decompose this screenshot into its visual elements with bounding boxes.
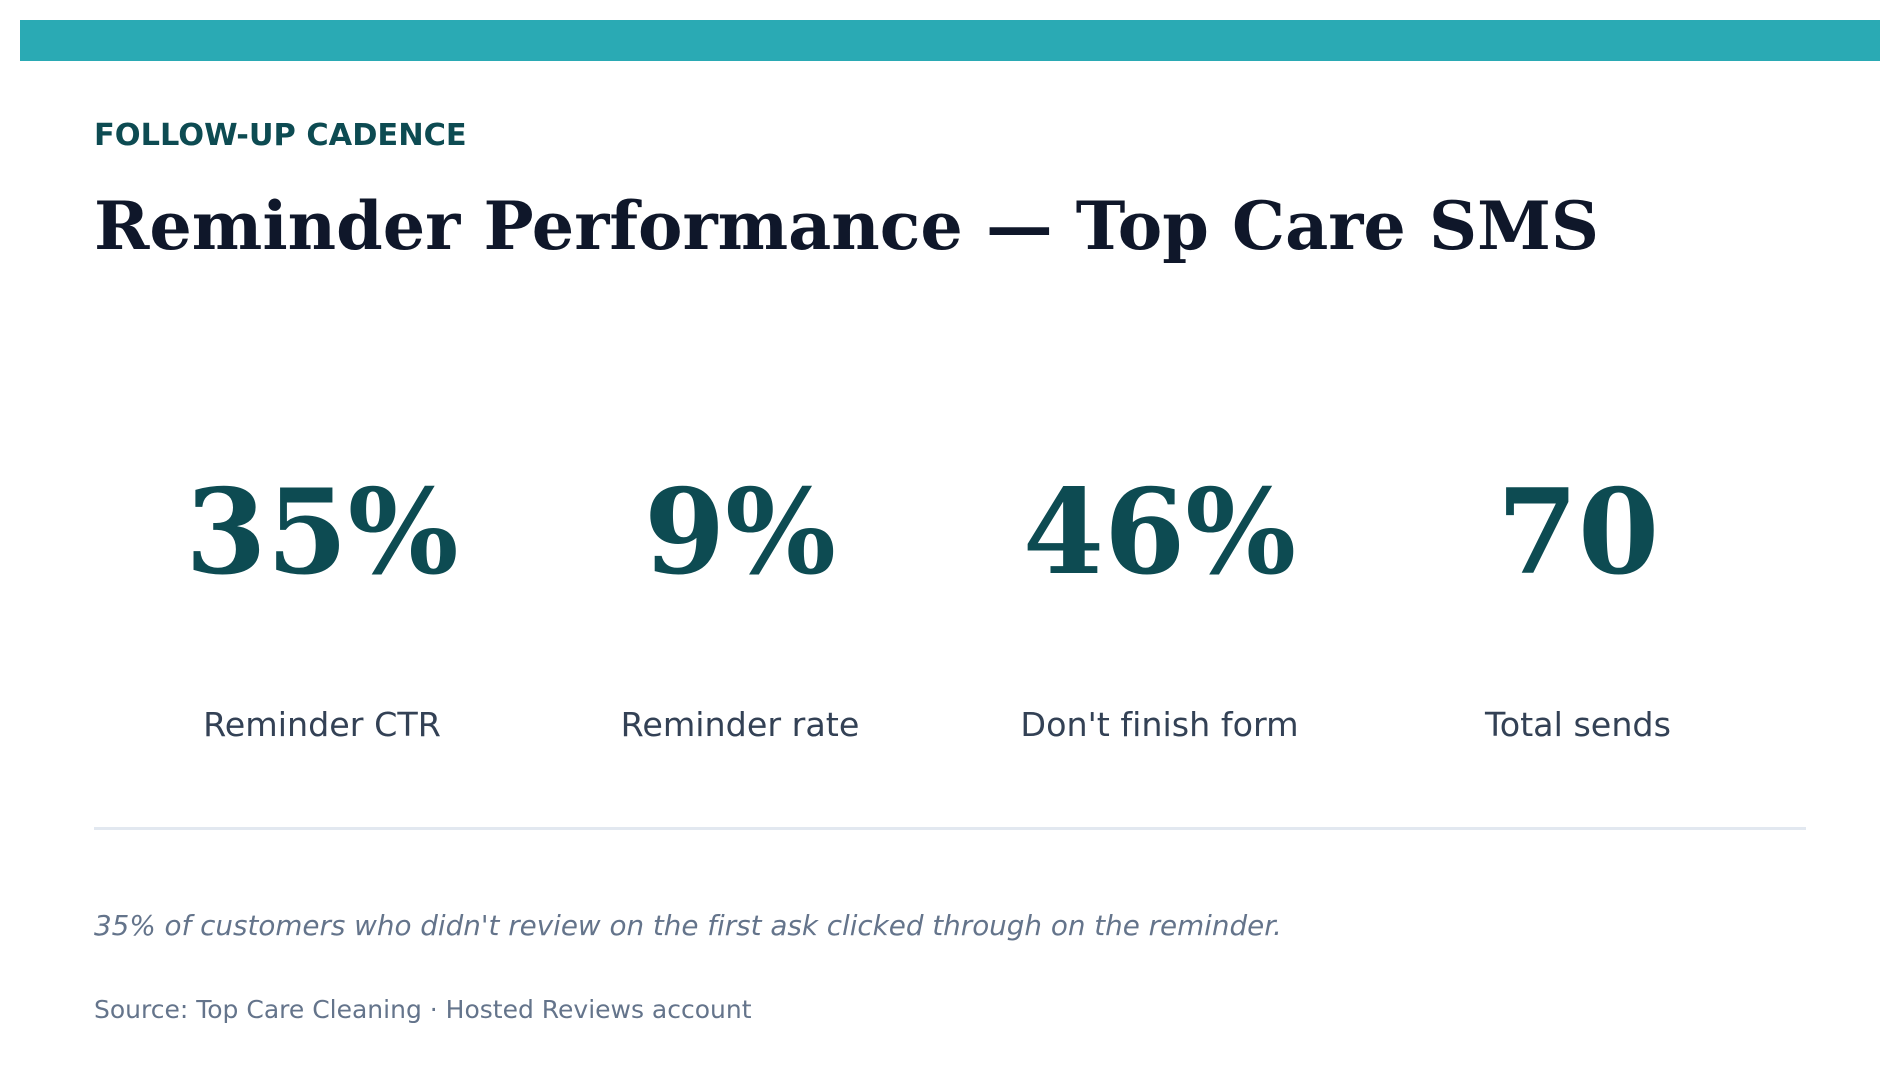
takeaway note: 35% of customers who didn't review on the first ask clicked through on the reminder. — [94, 909, 1282, 942]
label: Reminder rate: Reminder rate — [621, 704, 859, 744]
eyebrow heading: FOLLOW-UP CADENCE — [94, 118, 467, 153]
value: 35%: 35% — [185, 462, 459, 600]
value: 70: 70 — [1497, 462, 1659, 600]
top accent bar — [20, 20, 1880, 61]
label: Reminder CTR: Reminder CTR — [203, 704, 441, 744]
stat: Don't finish form — [1020, 462, 1299, 744]
stat: Reminder rate — [621, 462, 859, 744]
title: Reminder Performance — Top Care SMS — [94, 186, 1599, 265]
value: 46%: 46% — [1023, 462, 1296, 600]
label: Total sends: Total sends — [1485, 704, 1671, 744]
source line: Source: Top Care Cleaning · Hosted Reviews account — [94, 995, 752, 1024]
stat: Reminder CTR — [185, 462, 459, 744]
label: Don't finish form: Don't finish form — [1020, 704, 1299, 744]
value: 9%: 9% — [644, 462, 836, 600]
stat: Total sends — [1484, 462, 1671, 744]
